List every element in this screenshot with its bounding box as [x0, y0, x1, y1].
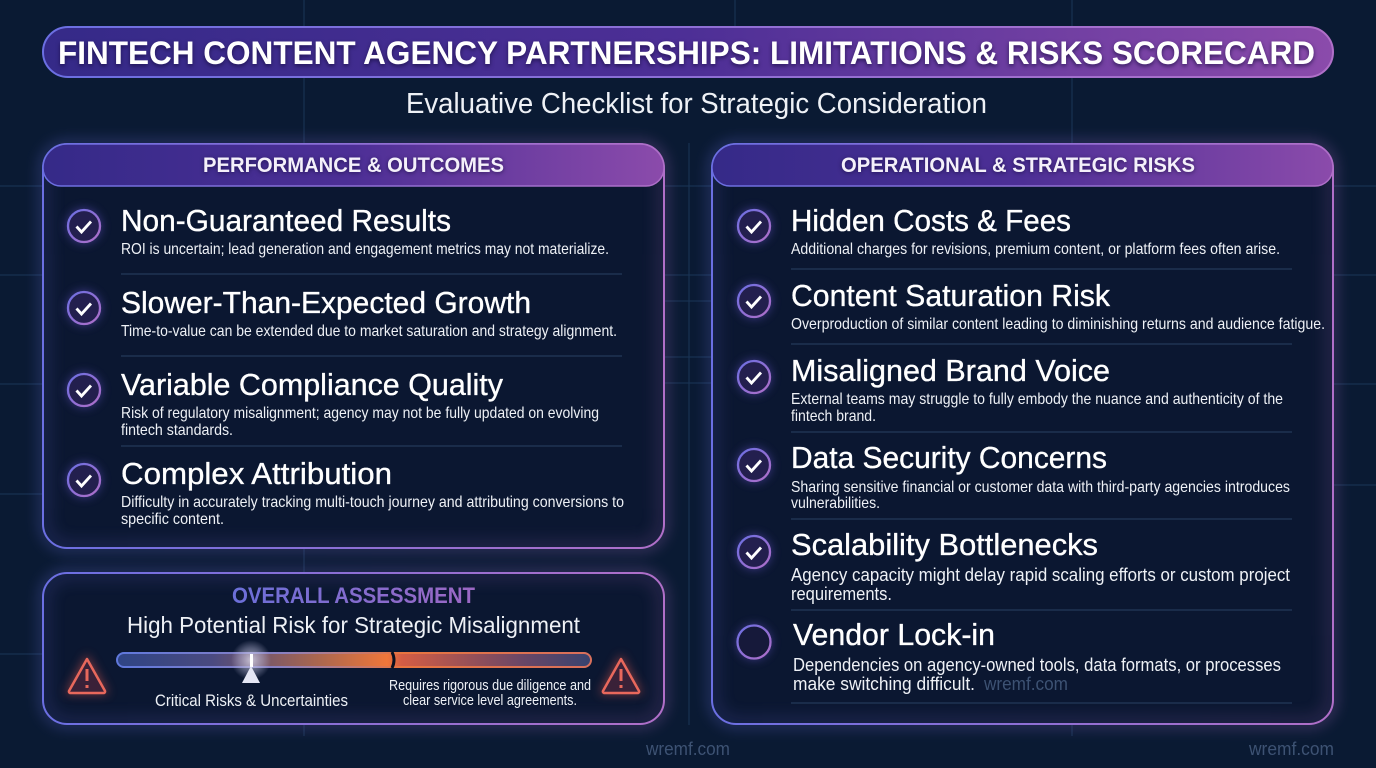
subtitle: Evaluative Checklist for Strategic Consideration [406, 88, 987, 120]
item: vendor lock-in [737, 617, 1281, 694]
panel header: operational and strategic risks: OPERATIONAL & STRATEGIC RISKS [841, 154, 1195, 177]
item: content saturation risk: Content Saturation Risk [791, 278, 1110, 313]
title banner [43, 27, 1333, 77]
item: vendor lock-in: Dependencies on agency-owned tools, data formats, or processes [793, 655, 1281, 675]
item: vendor lock-in: wremf.com [983, 674, 1068, 694]
item: scalability bottlenecks: Agency capacity might delay rapid scaling efforts or custom project [791, 565, 1290, 585]
heading: overall assessment: OVERALL ASSESSMENT [232, 583, 476, 608]
item: hidden costs and fees: Hidden Costs & Fees [791, 203, 1071, 238]
item: misaligned brand voice: Misaligned Brand Voice [791, 353, 1110, 388]
item: vendor lock-in: make switching difficult. [793, 674, 975, 694]
item: content saturation risk [737, 278, 1325, 333]
icon: right warning triangle [599, 654, 643, 694]
item: non-guaranteed results: ROI is uncertain; lead generation and engagement metrics may not materialize. [121, 241, 609, 258]
item: misaligned brand voice: fintech brand. [791, 408, 876, 425]
assessment verdict: High Potential Risk for Strategic Misalignment [127, 612, 581, 638]
item: data security concerns [737, 440, 1290, 512]
item: variable compliance quality [67, 367, 599, 439]
item: vendor lock-in: Vendor Lock-in [793, 617, 995, 652]
item: complex attribution: Complex Attribution [121, 456, 392, 491]
item: scalability bottlenecks: requirements. [791, 584, 892, 604]
item: scalability bottlenecks: Scalability Bottlenecks [791, 527, 1098, 562]
item: slower-than-expected growth [67, 285, 617, 340]
item: hidden costs and fees: Additional charges for revisions, premium content, or platform fees often arise. [791, 241, 1280, 258]
icon: left warning triangle [65, 654, 109, 694]
item: slower-than-expected growth: Slower-Than-Expected Growth [121, 285, 531, 320]
panel header: performance and outcomes: PERFORMANCE & OUTCOMES [203, 154, 504, 177]
panel: performance and outcomes [43, 144, 664, 548]
gauge label: Critical Risks & Uncertainties [155, 691, 348, 710]
watermark: right: wremf.com [1248, 739, 1334, 759]
item: non-guaranteed results: Non-Guaranteed Results [121, 203, 451, 238]
panel header: performance and outcomes [43, 144, 664, 186]
gauge note: clear service level agreements. [403, 693, 577, 709]
item: variable compliance quality: Variable Compliance Quality [121, 367, 503, 402]
title: FINTECH CONTENT AGENCY PARTNERSHIPS: LIMITATIONS & RISKS SCORECARD [58, 35, 1315, 71]
item: complex attribution: specific content. [121, 511, 224, 528]
item: misaligned brand voice: External teams may struggle to fully embody the nuance and authenticity of the [791, 391, 1283, 408]
gauge note [389, 678, 591, 709]
item: hidden costs and fees [737, 203, 1280, 258]
item: data security concerns: Sharing sensitive financial or customer data with third-party agencies introduces [791, 479, 1290, 496]
item: slower-than-expected growth: Time-to-value can be extended due to market saturation and strategy alignment. [121, 323, 617, 340]
panel: operational and strategic risks [712, 144, 1333, 724]
item: variable compliance quality: Risk of regulatory misalignment; agency may not be fully updated on evolving [121, 405, 599, 422]
item: misaligned brand voice [737, 353, 1283, 425]
panel: overall assessment [43, 573, 664, 724]
item: scalability bottlenecks [737, 527, 1290, 604]
risk gauge bar [117, 640, 591, 683]
item: variable compliance quality: fintech standards. [121, 422, 233, 439]
item: data security concerns: vulnerabilities. [791, 495, 880, 512]
item: complex attribution: Difficulty in accurately tracking multi-touch journey and attributing conversions to [121, 494, 624, 511]
panel header: operational and strategic risks [712, 144, 1333, 186]
gauge note: Requires rigorous due diligence and [389, 678, 591, 694]
item: complex attribution [67, 456, 624, 528]
item: non-guaranteed results [67, 203, 609, 258]
item: data security concerns: Data Security Concerns [791, 440, 1107, 475]
watermark: centre: wremf.com [645, 739, 730, 759]
